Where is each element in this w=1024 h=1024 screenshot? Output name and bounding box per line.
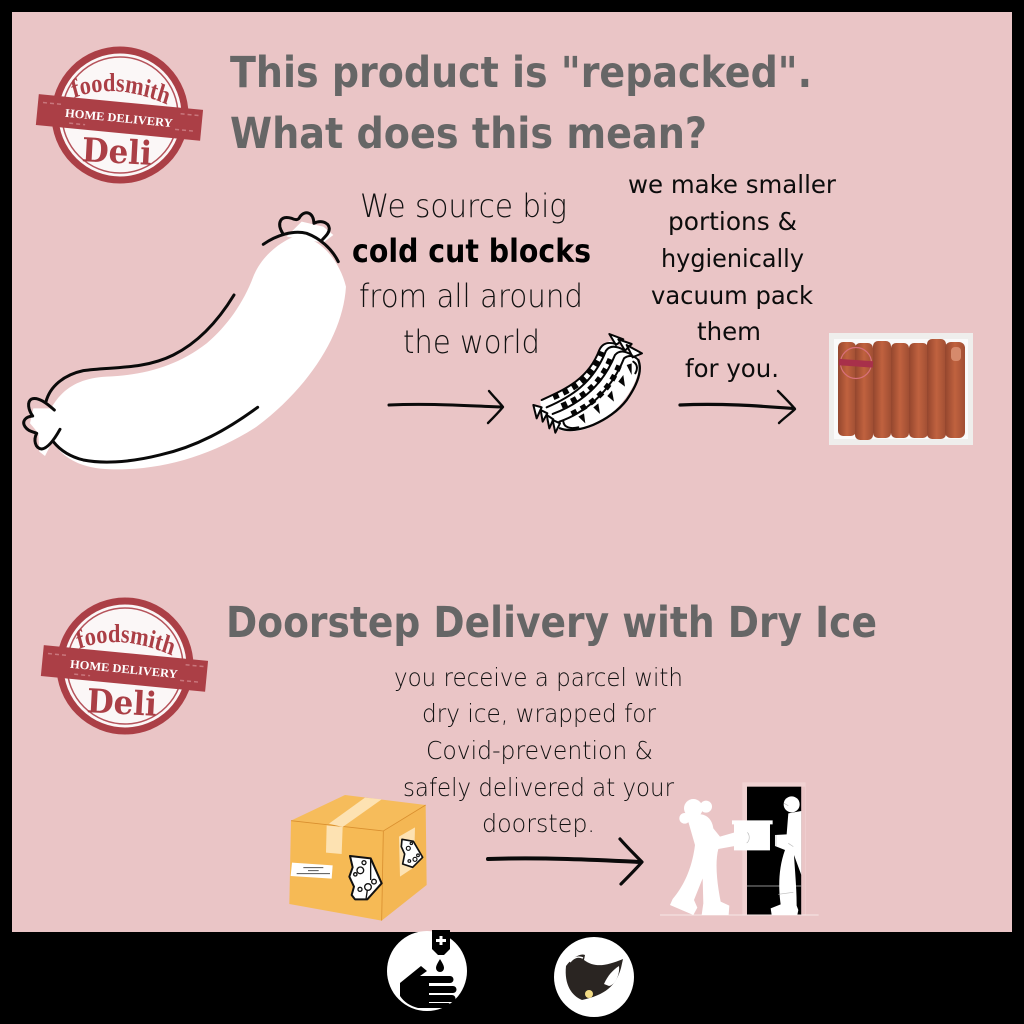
photo: vacuum pack of sausages	[829, 333, 973, 445]
logo: Foodsmith stamp bottom: HOME DELIVERY	[69, 657, 179, 681]
sticker: cheese small	[401, 839, 423, 867]
text: smaller portions: we make smaller	[628, 170, 837, 199]
figure: customer	[670, 799, 749, 915]
text: smaller portions	[628, 170, 837, 383]
icon: hand sanitizer	[387, 930, 467, 1011]
parcel	[732, 820, 773, 850]
text: smaller portions: vacuum pack	[651, 281, 814, 310]
text: parcel description: Covid-prevention &	[426, 736, 653, 765]
logo: Foodsmith stamp top: foodsmith	[71, 73, 169, 104]
text: smaller portions: hygienically	[661, 244, 804, 273]
text: smaller portions: them	[697, 317, 761, 346]
text: we source big: the world	[403, 323, 540, 361]
text: we source big	[352, 187, 591, 361]
illustration: cardboard box	[289, 795, 427, 921]
text: we source big: We source big	[360, 187, 567, 225]
logo: Foodsmith stamp bottom: foodsmith	[76, 624, 174, 656]
text: we source big: cold cut blocks	[352, 232, 591, 270]
text: smaller portions: for you.	[685, 354, 779, 383]
shipping label	[291, 863, 333, 879]
arrow: box to doorstep	[488, 839, 642, 884]
arrow: blocks to slices	[389, 391, 503, 423]
checker rows	[553, 352, 620, 414]
text: smaller portions: portions &	[668, 207, 797, 236]
figure: courier	[771, 796, 801, 915]
logo: Foodsmith stamp top	[36, 46, 203, 184]
arrow: slices to pack	[680, 391, 795, 423]
illustration: sliced sausages	[533, 334, 642, 433]
heading: repacked: This product is "repacked".	[230, 48, 812, 98]
illustration: big sausage	[24, 213, 346, 469]
heading: repacked: What does this mean?	[230, 109, 707, 159]
text: parcel description: dry ice, wrapped for	[422, 699, 657, 728]
sticker: cheese large	[349, 856, 382, 899]
heading: repacked	[230, 48, 812, 159]
icon: face mask	[554, 937, 634, 1017]
text: parcel description: safely delivered at your	[403, 773, 675, 802]
door	[742, 782, 806, 915]
logo: Foodsmith stamp top: HOME DELIVERY	[64, 106, 174, 130]
illustration: doorstep handover	[660, 782, 819, 915]
text: we source big: from all around	[359, 277, 583, 315]
text: parcel description: doorstep.	[482, 809, 595, 838]
tassels	[533, 334, 642, 433]
heading: doorstep delivery: Doorstep Delivery with Dry Ice	[226, 598, 877, 648]
logo: Foodsmith stamp top: Deli	[81, 130, 153, 173]
stamp on pack	[839, 348, 873, 378]
text: parcel description: you receive a parcel with	[394, 663, 683, 692]
logo: Foodsmith stamp bottom: Deli	[86, 681, 158, 724]
logo: Foodsmith stamp bottom	[40, 598, 208, 734]
text: parcel description	[394, 663, 683, 838]
drips	[578, 363, 632, 423]
